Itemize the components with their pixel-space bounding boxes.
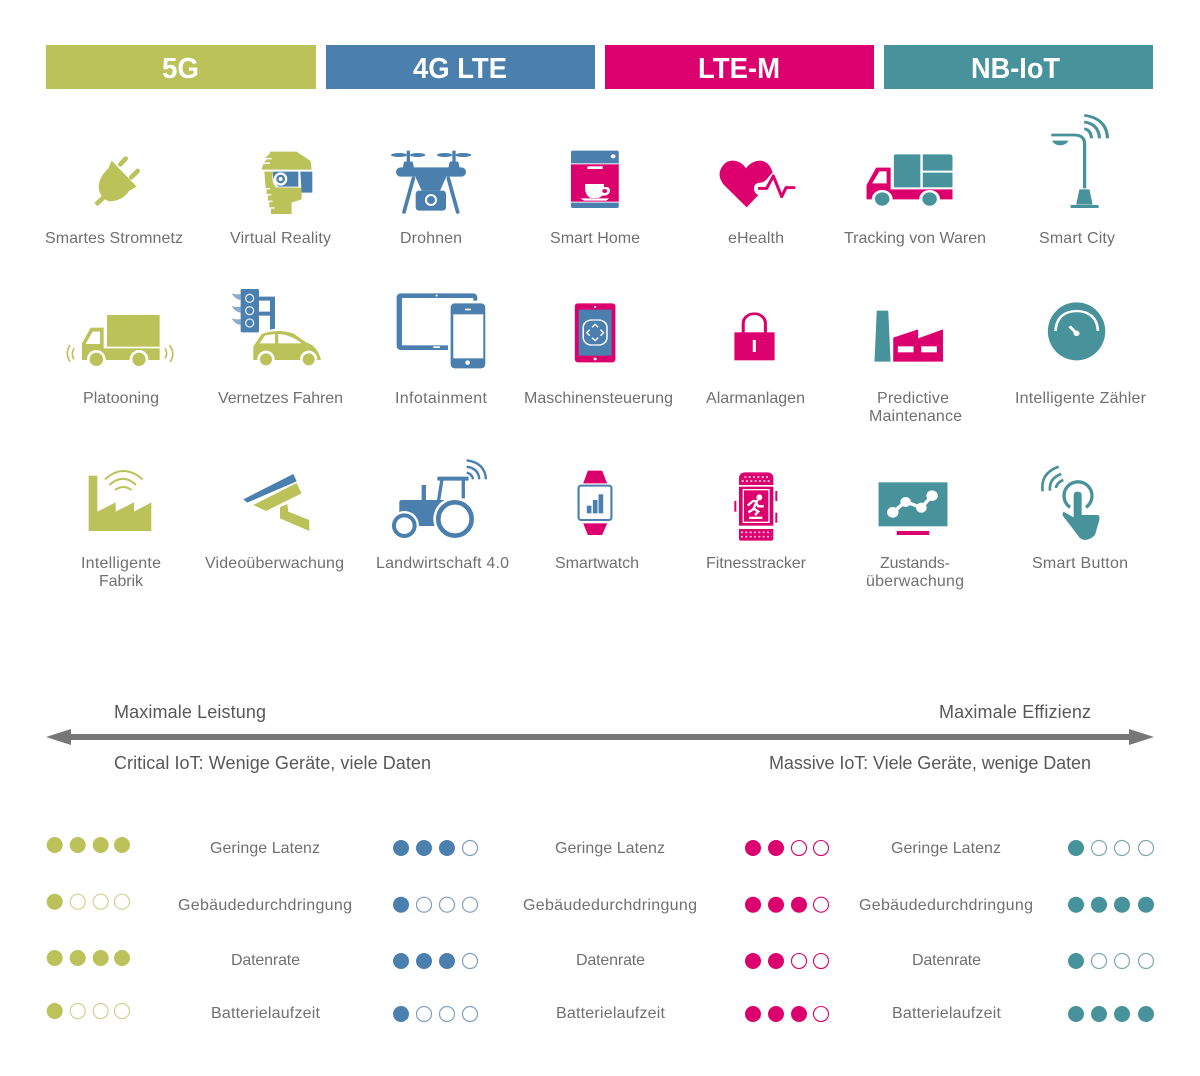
rating labels: column 1: Batterielaufzeit — [211, 1005, 321, 1022]
rating labels: column 2 — [523, 840, 697, 1022]
scale label: Maximale Effizienz: Maximale Effizienz — [939, 702, 1091, 722]
item: Smart Button — [1032, 467, 1128, 572]
rating labels: column 2: Gebäudedurchdringung — [523, 897, 697, 914]
icon: tablet with control pad — [575, 303, 615, 362]
label: Vernetzes Fahren — [218, 390, 343, 407]
rating labels: column 2: Datenrate — [576, 952, 645, 969]
label: Drohnen — [400, 230, 462, 247]
header bars — [46, 45, 1153, 89]
scale label: Maximale Leistung: Maximale Leistung — [114, 702, 266, 722]
rating labels: column 3: Gebäudedurchdringung — [859, 897, 1033, 914]
icon: drone — [391, 151, 471, 212]
item: Zustandsüberwachung — [866, 482, 964, 590]
header: NB-IoT: NB-IoT — [971, 53, 1060, 85]
label: Tracking von Waren — [844, 230, 986, 247]
label: Intelligente — [81, 555, 161, 572]
header: 4G LTE: 4G LTE — [413, 53, 507, 85]
header: 5G: 5G — [162, 53, 199, 85]
item: Alarmanlagen — [706, 314, 805, 407]
item: Smart City — [1039, 115, 1115, 247]
item: Landwirtschaft 4.0 — [376, 460, 509, 572]
dots: Datenrate 4 of 4 — [47, 950, 130, 966]
item: Smart Home — [550, 151, 640, 247]
icon: smartwatch — [579, 471, 611, 535]
rating labels: column 3: Batterielaufzeit — [892, 1005, 1002, 1022]
icon: padlock — [734, 314, 775, 360]
item: Vernetzes Fahren — [218, 289, 343, 407]
label: Maschinensteuerung — [524, 390, 673, 407]
dots: Datenrate 2 of 4 — [745, 953, 828, 969]
item: Tracking von Waren — [844, 154, 986, 247]
header: 4G LTE — [326, 45, 595, 89]
dots: Geringe Latenz 1 of 4 — [1068, 840, 1154, 856]
icon: smart street lamp — [1051, 115, 1108, 208]
dots: Batterielaufzeit 1 of 4 — [393, 1006, 478, 1022]
dots: Gebäudedurchdringung 1 of 4 — [47, 894, 130, 910]
icon: tractor — [390, 460, 486, 541]
label: überwachung — [866, 573, 964, 590]
label: Intelligente Zähler — [1015, 390, 1147, 407]
label: Maintenance — [869, 408, 962, 425]
label: Virtual Reality — [230, 230, 331, 247]
label: Alarmanlagen — [706, 390, 805, 407]
label: Smart City — [1039, 230, 1115, 247]
dots: Batterielaufzeit 4 of 4 — [1068, 1006, 1154, 1022]
icon: coffee machine — [571, 151, 619, 208]
label: Zustands- — [880, 555, 950, 572]
item: Drohnen — [391, 151, 471, 247]
item: Intelligente Fabrik — [81, 471, 161, 590]
item: Smartwatch — [555, 471, 639, 572]
item: Videoüberwachung — [205, 474, 344, 572]
dots: Datenrate 3 of 4 — [393, 953, 478, 969]
header: 5G — [46, 45, 316, 89]
rating labels: column 2: Batterielaufzeit — [556, 1005, 666, 1022]
icon: VR headset head — [262, 152, 312, 214]
item: Platooning — [67, 315, 173, 407]
icon: tablet and phone — [397, 293, 488, 371]
dots: Batterielaufzeit 3 of 4 — [745, 1006, 828, 1022]
dots: Gebäudedurchdringung 1 of 4 — [393, 897, 478, 913]
icon: fitness tracker — [734, 472, 777, 541]
icon: traffic light and car — [232, 289, 324, 368]
ratings: 4G LTE — [393, 840, 478, 1022]
icon: connected factory — [89, 471, 151, 531]
icon: factory — [874, 311, 943, 362]
item: Virtual Reality — [230, 152, 331, 247]
scale label: Massive IoT: Massive IoT: Viele Geräte, wenige Daten — [769, 753, 1091, 773]
dots: Geringe Latenz 4 of 4 — [47, 837, 130, 853]
icon: truck with signals — [67, 315, 173, 369]
icon: security camera — [243, 474, 309, 531]
rating labels: column 3 — [859, 840, 1033, 1022]
icon: monitor with chart — [879, 482, 947, 535]
item: Predictive Maintenance — [869, 311, 962, 425]
item: Infotainment — [395, 293, 488, 407]
icon: hand pressing button — [1042, 467, 1100, 540]
label: Landwirtschaft 4.0 — [376, 555, 509, 572]
rating labels: column 1: Datenrate — [231, 952, 300, 969]
ratings: LTE-M — [745, 840, 828, 1022]
label: Smartes Stromnetz — [45, 230, 183, 247]
icon: heart with pulse — [720, 161, 794, 207]
label: Smartwatch — [555, 555, 639, 572]
dots: Datenrate 1 of 4 — [1068, 953, 1154, 969]
rating labels: column 1: Geringe Latenz — [210, 840, 320, 857]
item: Smartes Stromnetz — [45, 159, 183, 247]
label: Smart Home — [550, 230, 640, 247]
rating labels: column 1 — [178, 840, 352, 1022]
label: Smart Button — [1032, 555, 1128, 572]
label: Videoüberwachung — [205, 555, 344, 572]
item: Maschinensteuerung — [524, 303, 673, 407]
label: Platooning — [83, 390, 159, 407]
icon: plug — [98, 159, 138, 203]
dots: Geringe Latenz 2 of 4 — [745, 840, 828, 856]
ratings: NB-IoT — [1068, 840, 1154, 1022]
icon: meter gauge — [1048, 302, 1105, 360]
header: NB-IoT — [884, 45, 1153, 89]
rating labels: column 3: Geringe Latenz — [891, 840, 1001, 857]
icon: delivery truck — [867, 154, 952, 208]
label: Infotainment — [395, 390, 488, 407]
label: eHealth — [728, 230, 784, 247]
label: Fitnesstracker — [706, 555, 807, 572]
header: LTE-M — [605, 45, 874, 89]
dots: Gebäudedurchdringung 3 of 4 — [745, 897, 828, 913]
scale label: Critical IoT: Critical IoT: Wenige Geräte, viele Daten — [114, 753, 431, 773]
label: Fabrik — [99, 573, 144, 590]
rating labels: column 2: Geringe Latenz — [555, 840, 665, 857]
ratings: 5G — [47, 837, 130, 1019]
arrow: performance to efficiency scale — [46, 729, 1154, 745]
dots: Gebäudedurchdringung 4 of 4 — [1068, 897, 1154, 913]
dots: Batterielaufzeit 1 of 4 — [47, 1003, 130, 1019]
item: Intelligente Zähler — [1015, 302, 1147, 407]
rating labels: column 1: Gebäudedurchdringung — [178, 897, 352, 914]
rating labels: column 3: Datenrate — [912, 952, 981, 969]
item: eHealth — [720, 161, 794, 247]
label: Predictive — [877, 390, 949, 407]
dots: Geringe Latenz 3 of 4 — [393, 840, 478, 856]
header: LTE-M: LTE-M — [698, 53, 780, 85]
item: Fitnesstracker — [706, 472, 807, 572]
